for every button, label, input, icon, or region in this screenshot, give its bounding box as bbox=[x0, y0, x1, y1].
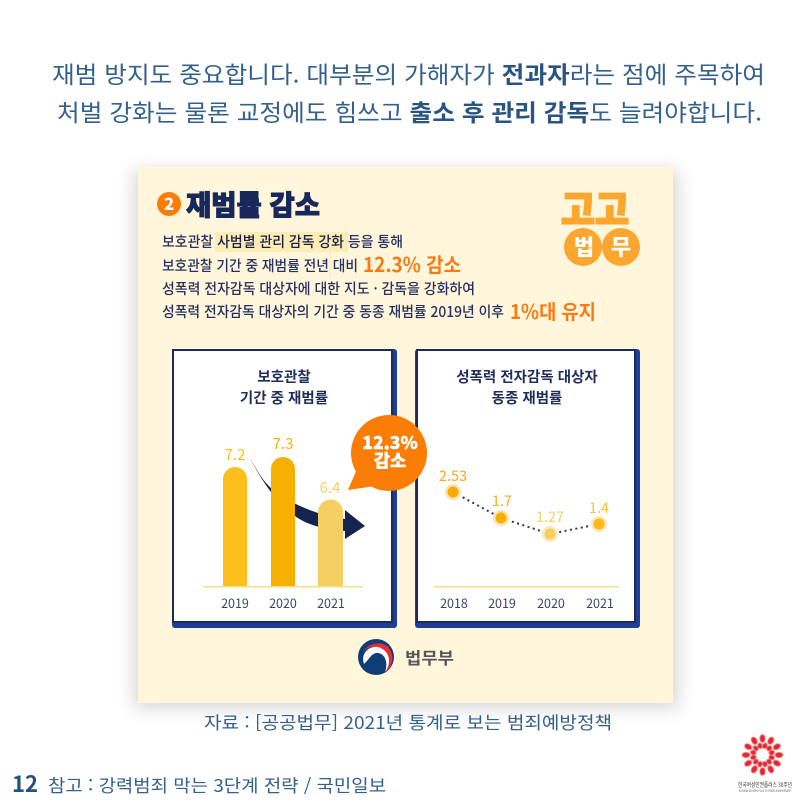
panel heading: 재범률 감소 bbox=[186, 184, 320, 224]
line chart years: 2020 bbox=[537, 593, 565, 612]
summary text: 12.3% 감소 bbox=[363, 249, 461, 278]
bar values: 7.3 bbox=[273, 433, 293, 454]
source note: 자료 : [공공법무] 2021년 통계로 보는 범죄예방정책 bbox=[204, 710, 612, 735]
chart heading: 성폭력 전자감독 대상자 bbox=[456, 366, 598, 387]
line and points bbox=[445, 484, 607, 542]
bar values: 6.4 bbox=[320, 477, 340, 498]
panel: recidivism reduction bbox=[134, 167, 678, 708]
summary text bbox=[162, 231, 596, 325]
intro text: 처벌 강화는 물론 교정에도 힘쓰고 출소 후 관리 감독 도 늘려야합니다. bbox=[57, 94, 762, 128]
bar years: 2021 bbox=[317, 593, 345, 612]
chart heading: 기간 중 재범률 bbox=[240, 387, 328, 408]
logo: ministry of justice: 법무부 bbox=[405, 645, 454, 669]
intro text bbox=[52, 56, 765, 128]
intro text: 재범 방지도 중요합니다. 대부분의 가해자가 전과자라는 점에 주목하여 bbox=[52, 56, 765, 90]
logo: public legal affairs bbox=[561, 180, 640, 266]
line chart years: 2021 bbox=[586, 593, 614, 612]
chart heading bbox=[456, 366, 598, 408]
callout: 12.3% decrease: 감소 bbox=[374, 448, 406, 473]
callout: 12.3% decrease: 12.3% bbox=[362, 430, 418, 455]
point values: 1.4 bbox=[589, 497, 609, 518]
point values bbox=[439, 465, 609, 527]
panel heading: 2 bbox=[164, 190, 174, 215]
logo: 30th anniversary: KOREAN WOMEN PLUS 30 YEARS ANNIVERSARY bbox=[739, 789, 791, 793]
summary text: 1%대 유지 bbox=[510, 296, 596, 325]
logo: public legal affairs: 고고 bbox=[561, 180, 629, 236]
card: probation recidivism bar chart bbox=[172, 349, 397, 628]
card: electronic monitoring line chart bbox=[415, 349, 640, 628]
point values: 2.53 bbox=[439, 465, 467, 486]
callout: 12.3% decrease bbox=[348, 415, 427, 491]
line chart years bbox=[440, 593, 614, 612]
logo: ministry of justice bbox=[358, 639, 454, 675]
chart heading: 보호관찰 bbox=[257, 366, 311, 387]
bar years: 2020 bbox=[269, 593, 297, 612]
page number: 12 bbox=[12, 767, 38, 799]
summary text: 성폭력 전자감독 대상자의 기간 중 동종 재범률 2019년 이후 bbox=[162, 301, 504, 322]
logo: 30th anniversary bbox=[738, 734, 792, 793]
summary text: 성폭력 전자감독 대상자에 대한 지도 · 감독을 강화하여 bbox=[162, 278, 475, 299]
point values: 1.7 bbox=[492, 490, 512, 511]
summary text: 보호관찰 기간 중 재범률 전년 대비 bbox=[162, 255, 358, 276]
logo: public legal affairs: 무 bbox=[611, 230, 631, 262]
bar years: 2019 bbox=[221, 593, 249, 612]
arrow: decline bbox=[250, 458, 365, 539]
chart heading bbox=[240, 366, 328, 408]
point values: 1.27 bbox=[536, 506, 564, 527]
chart heading: 동종 재범률 bbox=[492, 387, 562, 408]
bars bbox=[203, 457, 363, 588]
bar years bbox=[221, 593, 345, 612]
reference note: 참고 : 강력범죄 막는 3단계 전략 / 국민일보 bbox=[48, 773, 386, 798]
bar values bbox=[225, 433, 340, 498]
line chart years: 2018 bbox=[440, 593, 468, 612]
logo: public legal affairs: 법 bbox=[574, 230, 594, 262]
summary text: 보호관찰 사범별 관리 감독 강화 등을 통해 bbox=[162, 231, 403, 252]
line chart years: 2019 bbox=[488, 593, 516, 612]
bar values: 7.2 bbox=[225, 444, 245, 465]
logo: 30th anniversary: 한국여성인권플러스 30주년 bbox=[738, 780, 792, 789]
